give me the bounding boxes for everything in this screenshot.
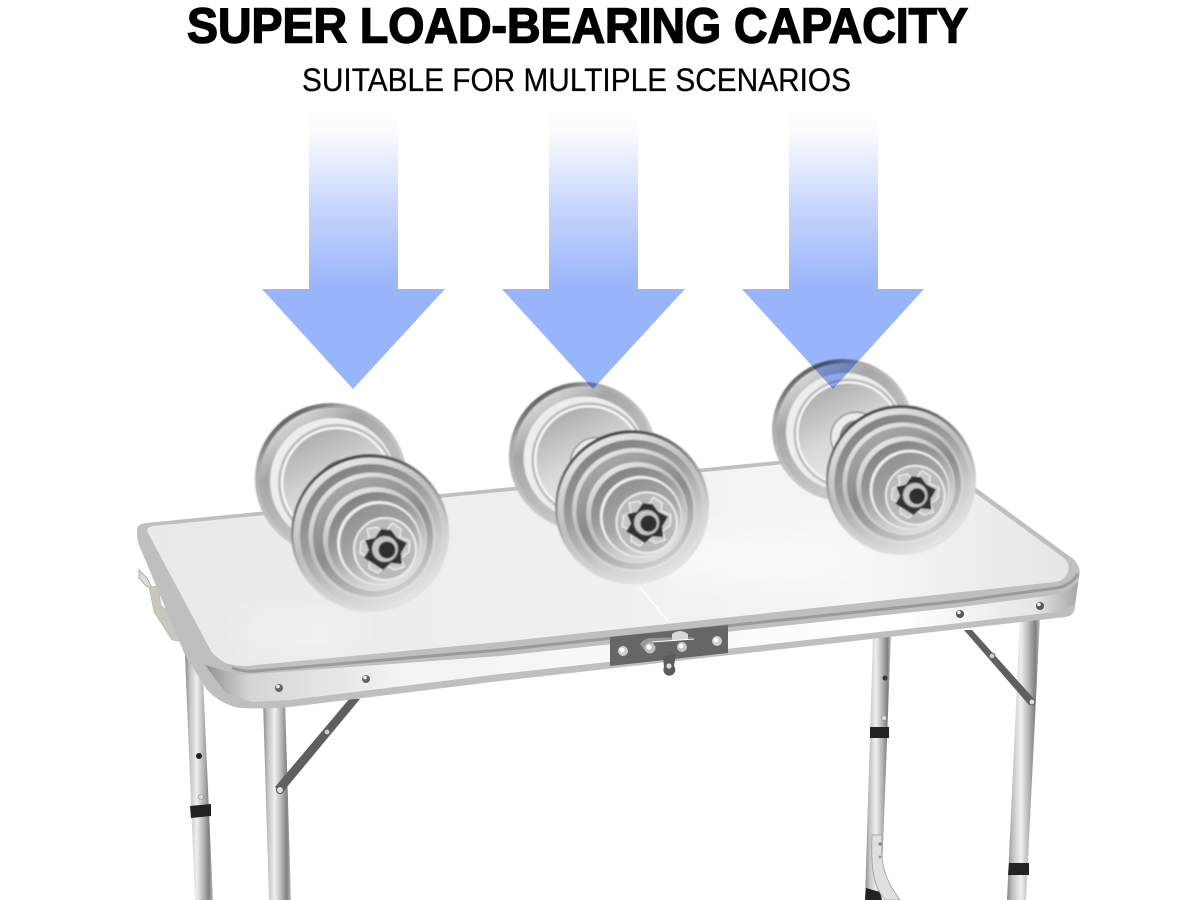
table	[137, 447, 1080, 900]
side carry handle	[139, 570, 184, 642]
dumbbell 2	[509, 382, 709, 584]
dumbbell 1 front plate	[291, 454, 449, 612]
dumbbell 2 front plate	[555, 430, 709, 584]
frame groove	[232, 574, 1078, 671]
arrow 1	[262, 108, 445, 389]
rear-left leg	[185, 655, 213, 900]
dumbbell 2 rear plate	[509, 382, 657, 530]
left folding brace	[275, 698, 360, 794]
title: SUPER LOAD-BEARING CAPACITY	[187, 0, 968, 54]
rear-right leg	[865, 635, 900, 900]
dumbbell 1 rear plate	[255, 403, 407, 555]
surface highlight	[240, 542, 860, 642]
fold seam	[640, 587, 668, 621]
dumbbell 3 rear plate	[772, 359, 914, 501]
dumbbell 1	[255, 403, 449, 612]
right folding brace	[964, 630, 1035, 705]
arrow 2	[502, 108, 685, 389]
front-left leg	[263, 700, 291, 900]
table frame	[137, 447, 1080, 708]
subtitle: SUITABLE FOR MULTIPLE SCENARIOS	[302, 62, 851, 98]
latch	[610, 625, 728, 676]
rivets	[275, 602, 1044, 692]
arrow 3	[742, 108, 924, 389]
table top surface	[147, 451, 1069, 666]
dumbbell 3 front plate	[826, 405, 976, 555]
dumbbell 3	[772, 359, 976, 555]
front-right leg	[1007, 618, 1040, 900]
front skirt	[205, 582, 1078, 702]
